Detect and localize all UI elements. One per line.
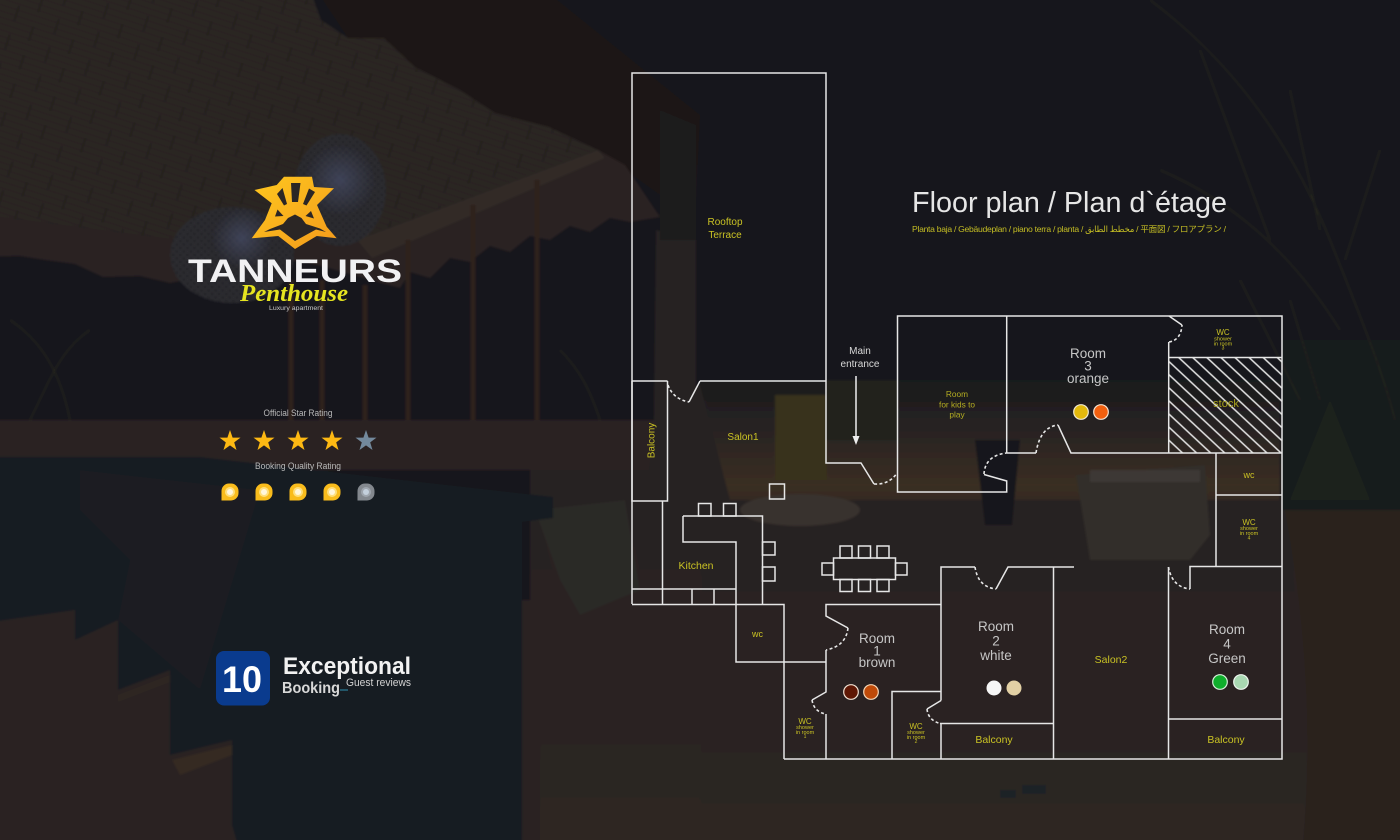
score tile bbox=[216, 651, 270, 706]
booking review badge bbox=[216, 651, 411, 706]
label: stock: stock bbox=[1213, 398, 1239, 410]
label: room 3: Room bbox=[1070, 346, 1106, 361]
score tile: 10 bbox=[222, 659, 262, 700]
colour dots: room 1 bbox=[844, 685, 878, 699]
label: room 4: Room bbox=[1209, 622, 1245, 637]
label: west balcony: Balcony bbox=[646, 423, 658, 458]
label: wc room 2: WC bbox=[909, 722, 923, 731]
label: wc east: wc bbox=[1242, 470, 1255, 480]
logo tagline: Luxury apartment bbox=[269, 305, 323, 312]
title: Floor plan / Plan d`étage bbox=[912, 187, 1227, 219]
label: wc room 3: in room bbox=[1214, 342, 1233, 348]
label: wc room 3: 3 bbox=[1222, 346, 1225, 352]
label: balcony room 4: Balcony bbox=[1207, 734, 1245, 746]
heading: booking quality rating: Booking Quality Rating bbox=[255, 461, 341, 471]
label: room 2: white bbox=[979, 648, 1012, 663]
stock hatch bbox=[1169, 358, 1282, 453]
label: room 1: Room bbox=[859, 631, 895, 646]
label: room 1: brown bbox=[859, 655, 895, 670]
label: wc room 2: shower bbox=[907, 730, 925, 736]
score label: Exceptional bbox=[283, 653, 411, 680]
label: wc room 1: in room bbox=[796, 730, 815, 736]
logo: Tanneurs Penthouse bbox=[188, 177, 402, 312]
logo script: Penthouse bbox=[239, 281, 348, 307]
label: wc room 3: WC bbox=[1216, 328, 1230, 337]
room 1 bbox=[844, 631, 895, 699]
icon: leather hide emblem bbox=[252, 177, 337, 249]
label: room 3: 3 bbox=[1084, 358, 1092, 374]
ratings block bbox=[220, 408, 376, 500]
label: wc: wc bbox=[751, 629, 763, 639]
label: main entrance: entrance bbox=[841, 359, 880, 370]
furniture: side table bbox=[770, 484, 784, 499]
label: wc room 1: shower bbox=[796, 725, 814, 731]
heading: official star rating: Official Star Rating bbox=[264, 408, 332, 418]
furniture: kitchen stools bbox=[698, 504, 775, 581]
subtitle: translations: Planta baja / Gebäudeplan / piano terra / planta / مخطط الطابق / 平面図 / フロアプラン / bbox=[912, 224, 1227, 234]
walls bbox=[632, 73, 1282, 759]
furniture: dining table bbox=[822, 546, 907, 592]
colour dots: room 4 bbox=[1213, 675, 1248, 689]
label: room 1: 1 bbox=[873, 644, 881, 658]
label: room 3: orange bbox=[1067, 371, 1109, 386]
label: wc room 1: 1 bbox=[804, 734, 807, 740]
label: salon 1: Salon1 bbox=[727, 432, 759, 443]
logo wordmark: TANNEURS bbox=[188, 253, 402, 289]
label: wc room 2: 2 bbox=[915, 739, 918, 745]
label: wc room 3: shower bbox=[1214, 336, 1232, 342]
label: room 2: Room bbox=[978, 619, 1014, 634]
room 2 bbox=[978, 619, 1022, 696]
label: main entrance: Main bbox=[849, 346, 871, 357]
booking brand: Booking bbox=[282, 680, 340, 697]
label: room 2: 2 bbox=[992, 634, 1000, 648]
room 3 bbox=[1067, 346, 1109, 419]
label: rooftop terrace: Terrace bbox=[708, 230, 742, 241]
label: kids room: Room bbox=[946, 389, 968, 399]
arrow: main entrance bbox=[852, 376, 860, 445]
room 4 bbox=[1208, 622, 1248, 689]
label: wc room 4: 4 bbox=[1248, 536, 1251, 542]
label: salon 2: Salon2 bbox=[1095, 654, 1128, 666]
label: wc room 4: shower bbox=[1240, 526, 1258, 532]
label: room 4: Green bbox=[1208, 651, 1246, 666]
label: wc room 4: WC bbox=[1242, 518, 1256, 527]
guest reviews label: Guest reviews bbox=[346, 677, 411, 689]
label: wc room 1: WC bbox=[798, 717, 812, 726]
label: kids room: for kids to bbox=[939, 399, 975, 409]
label: kids room: play bbox=[949, 409, 965, 419]
colour dots: room 2 bbox=[986, 680, 1022, 696]
label: wc room 2: in room bbox=[907, 735, 926, 741]
door swings bbox=[668, 325, 1190, 724]
label: room 4: 4 bbox=[1223, 636, 1231, 652]
label: rooftop terrace: Rooftop bbox=[707, 217, 743, 228]
colour dots: room 3 bbox=[1074, 405, 1108, 419]
star rating icons bbox=[220, 430, 376, 450]
label: balcony room 2: Balcony bbox=[975, 734, 1013, 746]
label: kitchen: Kitchen bbox=[678, 560, 714, 572]
floor plan bbox=[632, 73, 1282, 759]
label: wc room 4: in room bbox=[1240, 531, 1259, 537]
quality rating icons bbox=[222, 484, 374, 500]
brand dash bbox=[340, 690, 348, 691]
